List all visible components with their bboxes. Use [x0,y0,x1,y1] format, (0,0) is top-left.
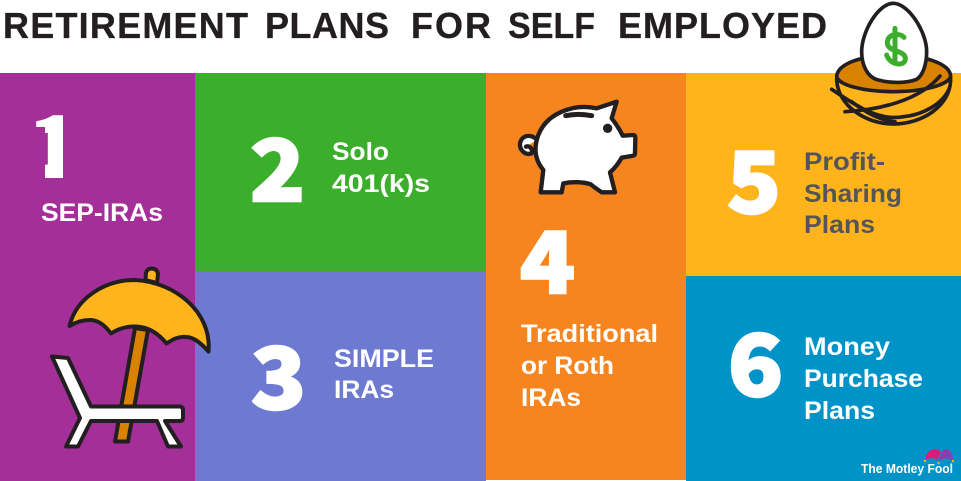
panel: 1 SEP-IRAs [0,73,195,481]
label: Traditional or Roth IRAs: IRAs [521,384,581,412]
panel: 2 Solo 401(k)s [195,73,486,271]
number 3: 3 [251,311,306,434]
title: FOR [411,5,491,46]
label: Profit-Sharing Plans: Profit- [804,148,885,176]
panel: 3 SIMPLE IRAs [195,271,486,481]
label: SIMPLE IRAs: SIMPLE [334,345,434,373]
label: Traditional or Roth IRAs: or Roth [521,352,614,380]
label: Profit-Sharing Plans: Sharing [804,180,902,208]
panel: 6 Money Purchase Plans [686,276,961,481]
number 4: 4 [520,195,575,318]
panel: 5 Profit-Sharing Plans [686,73,961,276]
logo: The Motley Fool [861,449,954,476]
label: Money Purchase Plans: Money [804,333,890,361]
label: SEP-IRAs: SEP-IRAs [41,199,163,227]
title: EMPLOYED [618,5,827,46]
label: Solo 401(k)s: Solo [332,138,389,166]
title: RETIREMENT [3,5,248,46]
label: Profit-Sharing Plans: Plans [804,211,875,239]
number 2: 2 [250,103,305,226]
panel: 4 Traditional or Roth IRAs [486,73,686,480]
label: Money Purchase Plans: Purchase [804,365,923,393]
wordmark: The Motley Fool [861,462,953,476]
icon: nest egg with dollar sign [832,3,951,124]
number 5: 5 [727,115,781,238]
icon: beach umbrella and lounge chair [52,268,209,446]
label: Traditional or Roth IRAs: Traditional [521,320,658,348]
number 6: 6 [728,298,783,421]
title: SELF [508,5,595,46]
number 1: 1 [29,80,81,203]
icon: jester hat [924,449,954,464]
title: PLANS [265,5,389,46]
icon: piggy bank [520,102,635,192]
label: Solo 401(k)s: 401(k)s [332,170,430,198]
label: Money Purchase Plans: Plans [804,397,875,425]
label: SIMPLE IRAs: IRAs [334,376,394,404]
